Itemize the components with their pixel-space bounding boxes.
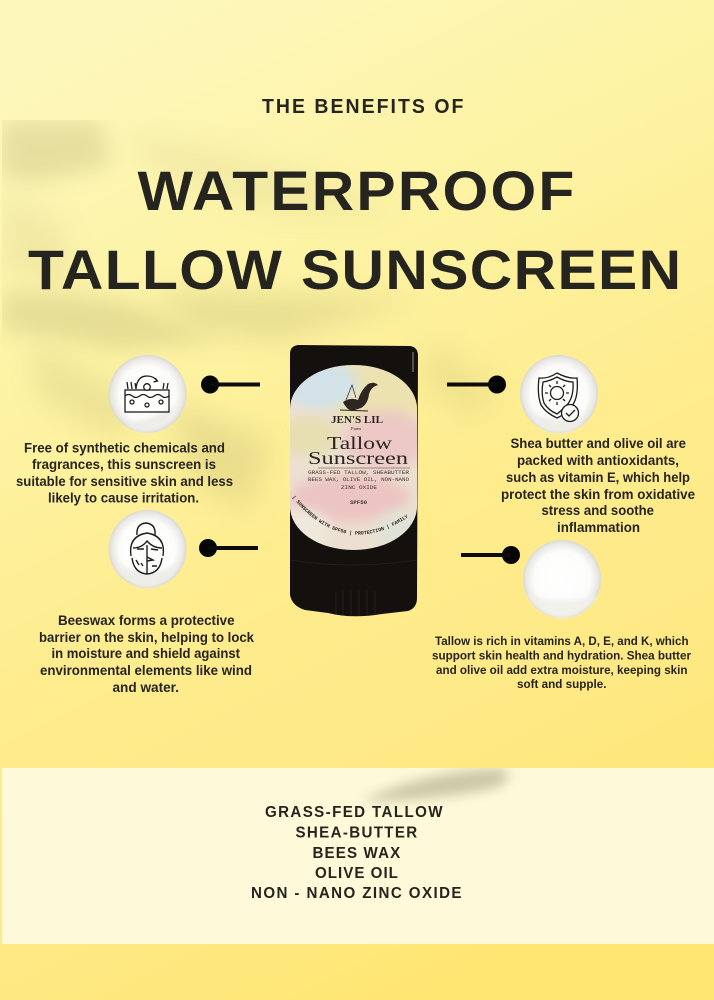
text: vitamins: and olive oil add extra moisture, keeping skin [436,663,688,677]
text: beeswax barrier: in moisture and shield against [52,646,241,661]
text: free of synthetic chemicals: suitable for sensitive skin and less [16,474,233,489]
text: antioxidants: protect the skin from oxidative [501,487,695,502]
title [28,160,681,302]
ingredients list [251,804,461,902]
eyebrow heading: THE BENEFITS OF [262,96,463,118]
ingredients list: OLIVE OIL [315,865,398,882]
icon: blank pearl circle [523,540,601,618]
product: sunscreen stick: ZINC OXIDE [341,485,377,491]
text: antioxidants [501,436,695,535]
text: vitamins [432,634,691,691]
text: beeswax barrier: and water. [112,680,179,695]
product: sunscreen stick: SPF50 [350,500,367,506]
ingredients list: BEES WAX [312,845,401,862]
blurred leaf shadows [0,120,500,510]
text: antioxidants: Shea butter and olive oil are [510,436,686,451]
text: free of synthetic chemicals: likely to cause irritation. [48,490,199,506]
text: beeswax barrier [39,613,255,695]
connector: lower right [461,546,520,564]
text: beeswax barrier: barrier on the skin, helping to lock [39,630,255,645]
text: antioxidants: packed with antioxidants, [517,453,679,468]
icon: skin layers in pearl circle [108,355,186,433]
product: sunscreen stick: Tallow [327,433,392,453]
icon: face mask in pearl circle [108,510,186,588]
title: WATERPROOF [138,160,574,223]
product: sunscreen stick: BEES WAX, OLIVE OIL, NON-NANO [308,477,409,483]
text: vitamins: Tallow is rich in vitamins A, D, E, and K, which [435,634,688,648]
text: free of synthetic chemicals: fragrances, this sunscreen is [32,457,216,472]
ingredients list: GRASS-FED TALLOW [265,804,443,821]
text: antioxidants: stress and soothe [542,503,654,518]
panel: ingredients [2,768,714,944]
text: vitamins: soft and supple. [517,677,606,691]
product: sunscreen stick [290,345,418,616]
text: antioxidants: such as vitamin E, which help [506,470,690,485]
product: sunscreen stick: Farm [351,426,362,431]
product: sunscreen stick: JEN'S LIL [331,415,383,426]
ingredients list: SHEA-BUTTER [296,824,417,842]
product: sunscreen stick: GRASS-FED TALLOW, SHEABUTTER [308,470,409,476]
connector: middle left [199,539,258,557]
ingredients list: NON - NANO ZINC OXIDE [251,885,461,902]
product: sunscreen stick: Sunscreen [308,448,408,468]
product: sunscreen stick: | SUNSCREEN WITH SPF50 | PROTECTION | FAMILY [292,496,408,536]
text: free of synthetic chemicals: Free of synthetic chemicals and [24,440,225,456]
connector: top left [201,376,260,394]
panel shadow [360,768,509,802]
text: antioxidants: inflammation [557,520,640,535]
text: beeswax barrier: Beeswax forms a protective [58,613,234,628]
text: vitamins: support skin health and hydration. Shea butter [432,648,691,662]
text: beeswax barrier: environmental elements like wind [40,663,252,678]
connector: top right [447,376,506,394]
label logo: rooster [340,383,378,411]
icon: sun shield in pearl circle [520,355,598,433]
text: free of synthetic chemicals [16,440,233,506]
title: TALLOW SUNSCREEN [28,239,681,302]
